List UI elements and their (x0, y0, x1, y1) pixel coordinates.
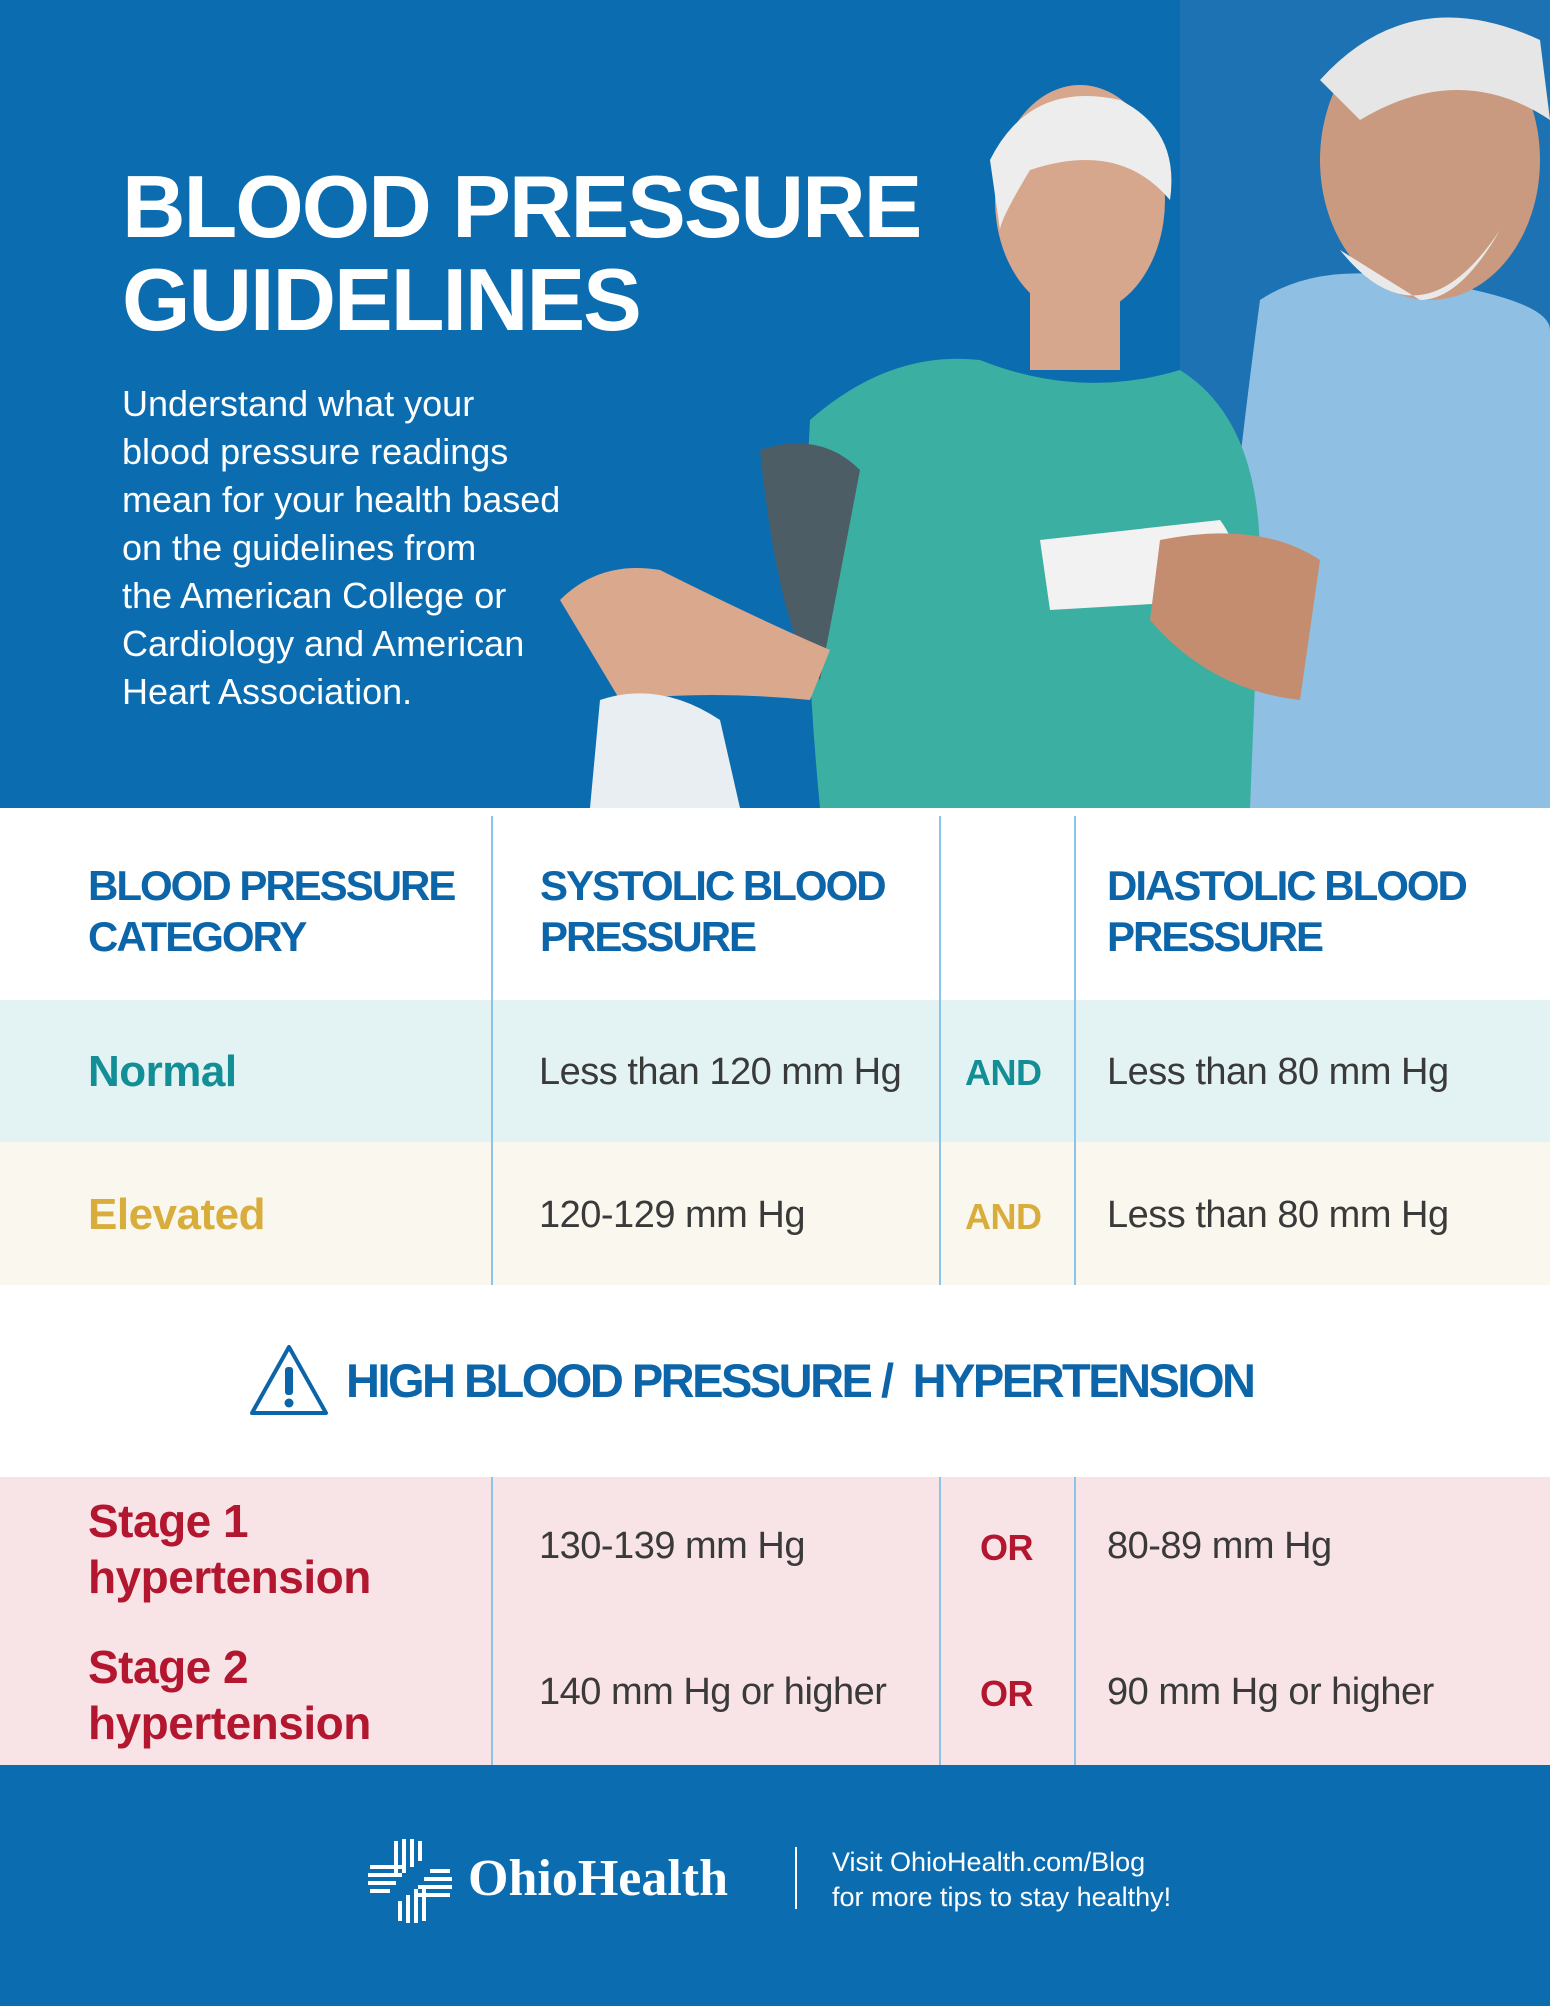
stage 2 row: hypertension (88, 1697, 371, 1749)
title (122, 157, 920, 349)
table: normal/elevated (0, 816, 1550, 1285)
elevated row: Elevated (88, 1190, 265, 1239)
stage 2 row (88, 1641, 371, 1749)
intro text: blood pressure readings (122, 431, 508, 472)
logo wordmark: OhioHealth (468, 1850, 728, 1907)
table: normal/elevated: SYSTOLIC BLOOD (540, 862, 885, 909)
stage 1 row: hypertension (88, 1551, 371, 1603)
table: normal/elevated: 120-129 mm Hg (539, 1194, 805, 1236)
stage 2 row: Stage 2 (88, 1641, 248, 1693)
column headers: BLOOD PRESSURE (88, 862, 454, 909)
intro text: Understand what your (122, 383, 474, 424)
logo icon (368, 1839, 452, 1923)
column headers: CATEGORY (88, 913, 305, 960)
table: normal/elevated: DIASTOLIC BLOOD (1107, 862, 1466, 909)
hypertension heading: HIGH BLOOD PRESSURE / HYPERTENSION (346, 1354, 1253, 1407)
table: normal/elevated: PRESSURE (1107, 913, 1322, 960)
row backgrounds (0, 1000, 1550, 1142)
header band (0, 0, 1550, 808)
table: hypertension stages (0, 1477, 1550, 1765)
intro text: the American College or (122, 575, 506, 616)
hypertension heading (250, 1344, 1253, 1415)
table: normal/elevated: Less than 120 mm Hg (539, 1051, 901, 1093)
stage 1 row: Stage 1 (88, 1495, 248, 1547)
stage 1 row (88, 1495, 371, 1603)
icon: warning (250, 1344, 328, 1415)
footer text (832, 1847, 1171, 1912)
footer text: for more tips to stay healthy! (832, 1882, 1171, 1912)
table: hypertension stages: 90 mm Hg or higher (1107, 1671, 1434, 1713)
photo: couple measuring blood pressure (560, 0, 1550, 808)
table: normal/elevated: AND (965, 1052, 1042, 1093)
footer text: Visit OhioHealth.com/Blog (832, 1847, 1145, 1877)
title: GUIDELINES (122, 250, 640, 349)
intro text (122, 383, 560, 712)
footer (0, 1765, 1550, 2006)
intro text: Cardiology and American (122, 623, 524, 664)
intro text: on the guidelines from (122, 527, 476, 568)
column headers (88, 862, 455, 960)
normal row: Normal (88, 1047, 237, 1096)
table: normal/elevated: Less than 80 mm Hg (1107, 1051, 1449, 1093)
table: normal/elevated: Less than 80 mm Hg (1107, 1194, 1449, 1236)
table: normal/elevated: AND (965, 1196, 1042, 1237)
table: normal/elevated: PRESSURE (540, 913, 755, 960)
table: hypertension stages: OR (980, 1527, 1033, 1568)
table: hypertension stages: 130-139 mm Hg (539, 1525, 805, 1567)
intro text: Heart Association. (122, 671, 412, 712)
intro text: mean for your health based (122, 479, 560, 520)
table: hypertension stages: 140 mm Hg or higher (539, 1671, 886, 1713)
title: BLOOD PRESSURE (122, 157, 920, 256)
table: hypertension stages: 80-89 mm Hg (1107, 1525, 1332, 1567)
table: hypertension stages: OR (980, 1673, 1033, 1714)
